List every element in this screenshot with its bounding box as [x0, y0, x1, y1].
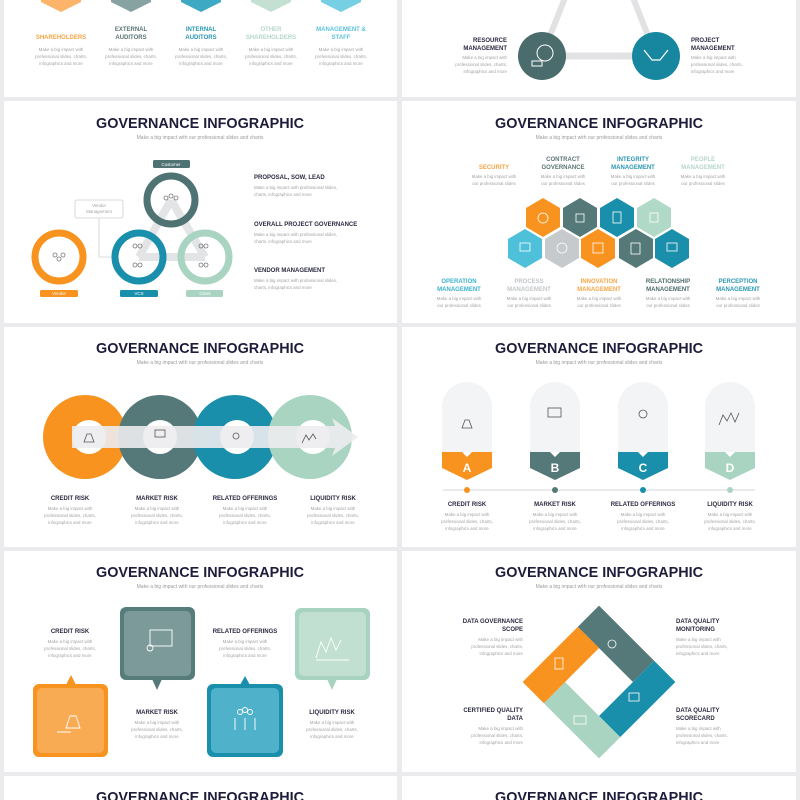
slide: hexagon grid (row 2 right) [402, 101, 796, 323]
risk labels [44, 496, 359, 525]
slide: bottom partial left [4, 776, 397, 800]
box labels: infographics and more [48, 653, 92, 658]
cards: C [639, 461, 648, 475]
timeline labels: professional slides, charts, [704, 519, 756, 524]
diamond labels: DATA [507, 716, 524, 722]
top labels: our professional slides [541, 181, 586, 186]
bottom labels: our professional slides [437, 303, 482, 308]
top labels: our professional slides [681, 181, 726, 186]
title: GOVERNANCE INFOGRAPHIC [96, 115, 304, 132]
label: resource management: professional slides, charts, [455, 62, 507, 67]
bottom labels: Make a big impact with [646, 296, 691, 301]
cards: A [463, 461, 472, 475]
timeline labels: CREDIT RISK [448, 502, 487, 508]
top labels: GOVERNANCE [541, 165, 585, 171]
diamond labels: DATA QUALITY [676, 708, 720, 714]
circle diagram: VCS [134, 291, 144, 296]
timeline labels: professional slides, charts, [617, 519, 669, 524]
bottom labels: RELATIONSHIP [646, 279, 690, 285]
bottom labels: MANAGEMENT [437, 287, 481, 293]
risk labels: infographics and more [223, 520, 267, 525]
risk labels: MARKET RISK [136, 496, 178, 502]
risk labels: Make a big impact with [135, 506, 180, 511]
text list: VENDOR MANAGEMENT [254, 268, 325, 274]
bottom labels: Make a big impact with [577, 296, 622, 301]
text list [254, 175, 357, 290]
text list: Make a big impact with professional slides, [254, 232, 337, 237]
stakeholder labels: Make a big impact with [249, 47, 294, 52]
cards: D [726, 461, 735, 475]
slide: vendor governance (row 2 left) [4, 101, 397, 323]
stakeholder labels: professional slides, charts, [175, 54, 227, 59]
text list: Make a big impact with professional slides, [254, 185, 337, 190]
diamond labels: DATA GOVERNANCE [463, 619, 523, 625]
top labels: Make a big impact with [681, 174, 726, 179]
slide: ABCD timeline (row 3 right) [402, 327, 796, 547]
top labels: PEOPLE [691, 157, 715, 163]
title: Make a big impact with our professional slides and charts [536, 135, 663, 141]
stakeholder labels: Make a big impact with [319, 47, 364, 52]
diamond labels: professional slides, charts, [471, 733, 523, 738]
title: Make a big impact with our professional slides and charts [137, 135, 264, 141]
timeline labels: professional slides, charts, [441, 519, 493, 524]
stakeholder labels [35, 27, 367, 66]
box labels: infographics and more [310, 734, 354, 739]
box labels: professional slides, charts, [44, 646, 96, 651]
bottom labels: MANAGEMENT [577, 287, 621, 293]
stakeholder labels: infographics and more [109, 61, 153, 66]
boxes [33, 607, 370, 757]
circle diagram: Vendor [92, 203, 106, 208]
cards [442, 382, 755, 480]
hexagons [508, 198, 689, 268]
bottom labels [437, 279, 761, 308]
cards: B [551, 461, 560, 475]
risk labels: professional slides, charts, [219, 513, 271, 518]
bottom labels: MANAGEMENT [646, 287, 690, 293]
box labels: professional slides, charts, [219, 646, 271, 651]
label: project management: infographics and more [691, 69, 735, 74]
risk labels: Make a big impact with [48, 506, 93, 511]
box labels: infographics and more [223, 653, 267, 658]
diamond labels: professional slides, charts, [676, 733, 728, 738]
stakeholder labels: STAFF [332, 35, 351, 41]
icon circle: resource management [518, 32, 566, 80]
bottom labels: Make a big impact with [507, 296, 552, 301]
stakeholder labels: OTHER [260, 27, 282, 33]
slide: data quality diamond (row 4 right) [402, 551, 796, 772]
top labels [472, 157, 726, 186]
text list: OVERALL PROJECT GOVERNANCE [254, 222, 357, 228]
timeline labels: Make a big impact with [533, 512, 578, 517]
bottom labels: MANAGEMENT [507, 287, 551, 293]
box labels: professional slides, charts, [306, 727, 358, 732]
diamond labels: SCOPE [502, 627, 523, 633]
risk labels: Make a big impact with [311, 506, 356, 511]
top labels: MANAGEMENT [611, 165, 655, 171]
timeline labels: infographics and more [621, 526, 665, 531]
timeline [443, 487, 755, 493]
top labels: SECURITY [479, 165, 509, 171]
box labels: Make a big impact with [48, 639, 93, 644]
box labels: infographics and more [135, 734, 179, 739]
bottom labels: our professional slides [507, 303, 552, 308]
label: resource management [455, 38, 508, 74]
slide: risk circles arrow (row 3 left) [4, 327, 397, 547]
diamond labels: Make a big impact with [676, 637, 721, 642]
diamond labels: professional slides, charts, [676, 644, 728, 649]
chevron markers [41, 0, 361, 12]
box labels: LIQUIDITY RISK [309, 710, 355, 716]
risk labels: RELATED OFFERINGS [213, 496, 277, 502]
stakeholder labels: SHAREHOLDERS [246, 35, 296, 41]
bottom labels: Make a big impact with [437, 296, 482, 301]
bottom labels: PERCEPTION [718, 279, 758, 285]
risk labels: infographics and more [135, 520, 179, 525]
stakeholder labels: EXTERNAL [115, 27, 147, 33]
bottom labels: PROCESS [514, 279, 544, 285]
stakeholder labels: infographics and more [249, 61, 293, 66]
title: GOVERNANCE INFOGRAPHIC [495, 340, 703, 357]
top labels: Make a big impact with [541, 174, 586, 179]
text list: charts, infographics and more [254, 285, 312, 290]
diamond labels: infographics and more [676, 740, 720, 745]
label: project management [691, 38, 743, 74]
top labels: our professional slides [472, 181, 517, 186]
diamond labels: infographics and more [480, 651, 524, 656]
text list: PROPOSAL, SOW, LEAD [254, 175, 325, 181]
stakeholder labels: professional slides, charts, [315, 54, 367, 59]
stakeholder labels: Make a big impact with [179, 47, 224, 52]
title: GOVERNANCE INFOGRAPHIC [495, 115, 703, 132]
text list: Make a big impact with professional slides, [254, 278, 337, 283]
top labels: CONTRACT [546, 157, 580, 163]
slide: triangle management (top right, partial) [402, 0, 796, 97]
risk labels: professional slides, charts, [307, 513, 359, 518]
label: project management: Make a big impact with [691, 55, 736, 60]
text list: charts, infographics and more [254, 239, 312, 244]
top labels: MANAGEMENT [681, 165, 725, 171]
title [96, 340, 304, 366]
diamond labels: SCORECARD [676, 716, 715, 722]
icon circle: project management [632, 32, 680, 80]
risk labels: LIQUIDITY RISK [310, 496, 356, 502]
label: resource management: Make a big impact with [462, 55, 508, 60]
stakeholder labels: AUDITORS [185, 35, 217, 41]
circle diagram: Client [199, 291, 211, 296]
title: GOVERNANCE INFOGRAPHIC [96, 564, 304, 581]
title [495, 115, 703, 141]
diamond labels: DATA QUALITY [676, 619, 720, 625]
label: resource management: MANAGEMENT [463, 46, 507, 52]
timeline labels: infographics and more [533, 526, 577, 531]
top labels: Make a big impact with [472, 174, 517, 179]
risk labels: CREDIT RISK [51, 496, 90, 502]
timeline labels [441, 502, 756, 531]
stakeholder labels: INTERNAL [186, 27, 216, 33]
label: resource management: infographics and more [464, 69, 508, 74]
stakeholder labels: AUDITORS [115, 35, 147, 41]
box labels: RELATED OFFERINGS [213, 629, 277, 635]
top labels: INTEGRITY [617, 157, 649, 163]
title [495, 340, 703, 366]
timeline labels: RELATED OFFERINGS [611, 502, 675, 508]
bottom labels: INNOVATION [581, 279, 617, 285]
box labels: MARKET RISK [136, 710, 178, 716]
diamond labels: infographics and more [676, 651, 720, 656]
stakeholder labels: Make a big impact with [109, 47, 154, 52]
stakeholder labels: SHAREHOLDERS [36, 35, 86, 41]
title: GOVERNANCE INFOGRAPHIC [495, 564, 703, 581]
circle diagram: Management [86, 209, 113, 214]
title [96, 564, 304, 590]
diamond labels: CERTIFIED QUALITY [463, 708, 523, 714]
box labels: Make a big impact with [135, 720, 180, 725]
box labels: CREDIT RISK [51, 629, 90, 635]
timeline labels: professional slides, charts, [529, 519, 581, 524]
slide: bottom partial right [402, 776, 796, 800]
stakeholder labels: infographics and more [39, 61, 83, 66]
risk labels: Make a big impact with [223, 506, 268, 511]
bottom labels: our professional slides [646, 303, 691, 308]
top labels: our professional slides [611, 181, 656, 186]
risk labels: infographics and more [311, 520, 355, 525]
circle diagram: Vendor [52, 291, 66, 296]
box labels [44, 629, 358, 739]
bottom labels: MANAGEMENT [716, 287, 760, 293]
label: project management: PROJECT [691, 38, 720, 44]
circle diagram: Customer [161, 162, 181, 167]
timeline labels: infographics and more [445, 526, 489, 531]
timeline labels: LIQUIDITY RISK [707, 502, 753, 508]
title: Make a big impact with our professional slides and charts [137, 584, 264, 590]
slide: stakeholders (top left, partial) [4, 0, 397, 97]
title [96, 115, 304, 141]
diamond labels: MONITORING [676, 627, 715, 633]
timeline labels: Make a big impact with [621, 512, 666, 517]
stakeholder labels: infographics and more [179, 61, 223, 66]
timeline labels: MARKET RISK [534, 502, 576, 508]
label: project management: MANAGEMENT [691, 46, 735, 52]
stakeholder labels: Make a big impact with [39, 47, 84, 52]
risk labels: professional slides, charts, [131, 513, 183, 518]
title: GOVERNANCE INFOGRAPHIC [96, 340, 304, 357]
stakeholder labels: professional slides, charts, [35, 54, 87, 59]
diamond labels: professional slides, charts, [471, 644, 523, 649]
stakeholder labels: professional slides, charts, [245, 54, 297, 59]
diamond labels [463, 619, 728, 745]
top labels: Make a big impact with [611, 174, 656, 179]
circles with arrow [43, 395, 358, 479]
risk labels: professional slides, charts, [44, 513, 96, 518]
bottom labels: our professional slides [716, 303, 761, 308]
slide: callout boxes (row 4 left) [4, 551, 397, 772]
stakeholder labels: infographics and more [319, 61, 363, 66]
title: Make a big impact with our professional slides and charts [536, 584, 663, 590]
stakeholder labels: professional slides, charts, [105, 54, 157, 59]
box labels: professional slides, charts, [131, 727, 183, 732]
timeline labels: Make a big impact with [445, 512, 490, 517]
box labels: Make a big impact with [223, 639, 268, 644]
diamond labels: Make a big impact with [478, 637, 524, 642]
text list: charts, infographics and more [254, 192, 312, 197]
bottom labels: OPERATION [441, 279, 477, 285]
circle diagram [35, 160, 229, 297]
bottom labels: our professional slides [577, 303, 622, 308]
diamond labels: infographics and more [480, 740, 524, 745]
timeline labels: infographics and more [708, 526, 752, 531]
diamond [523, 606, 675, 758]
diamond icons [555, 640, 639, 724]
diamond labels: Make a big impact with [676, 726, 721, 731]
title [495, 564, 703, 590]
box labels: Make a big impact with [310, 720, 355, 725]
stakeholder labels: MANAGEMENT & [316, 27, 366, 33]
title: Make a big impact with our professional slides and charts [536, 360, 663, 366]
risk labels: infographics and more [48, 520, 92, 525]
diamond labels: Make a big impact with [478, 726, 524, 731]
label: project management: professional slides, charts, [691, 62, 743, 67]
timeline labels: Make a big impact with [708, 512, 753, 517]
bottom labels: Make a big impact with [716, 296, 761, 301]
label: resource management: RESOURCE [473, 38, 507, 44]
title: Make a big impact with our professional slides and charts [137, 360, 264, 366]
